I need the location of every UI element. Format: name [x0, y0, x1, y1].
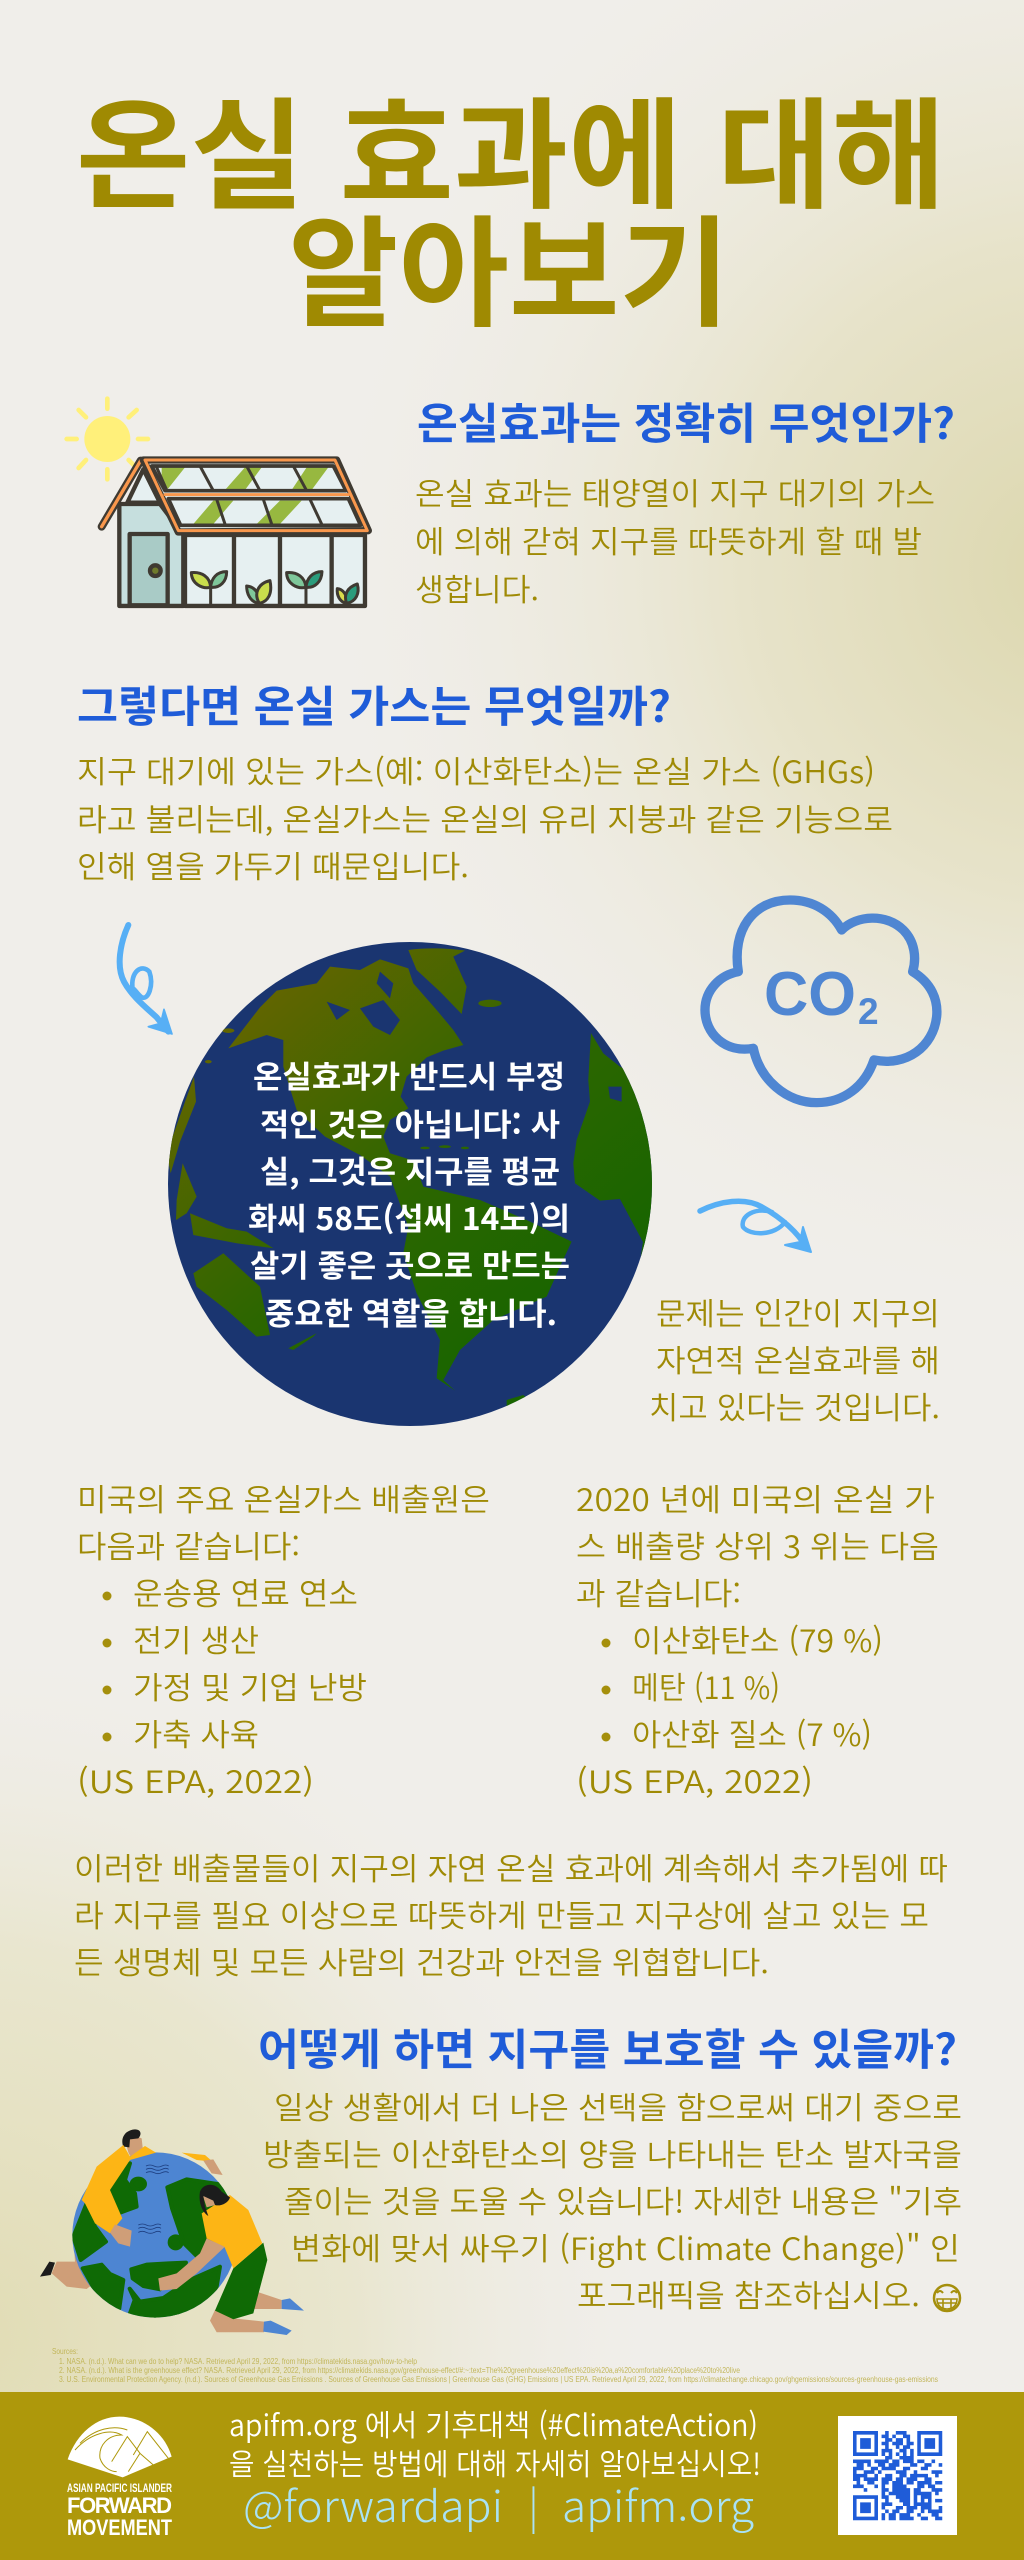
social handles: apifm.org — [562, 2473, 754, 2535]
text block: consequences: 이러한 배출물들이 지구의 자연 온실 효과에 계속해서 추가됨에 따 — [74, 1844, 948, 1889]
logo: MOVEMENT — [67, 2515, 172, 2540]
title: 알아보기 — [288, 177, 730, 351]
callout: text on earth: 적인 것은 아닙니다: 사 — [260, 1100, 560, 1145]
callout: text on earth: 온실효과가 반드시 부정 — [253, 1052, 565, 1097]
text block: top 3 emissions list: (US EPA, 2022) — [576, 1757, 813, 1802]
pacific islands — [190, 1213, 273, 1248]
text block: the problem: 치고 있다는 것입니다. — [649, 1383, 940, 1428]
man back arm — [182, 2153, 213, 2162]
text block: main emission sources list: 가정 및 기업 난방 — [133, 1663, 367, 1708]
caribbean islands — [420, 1147, 430, 1149]
text block: greenhouse effect definition — [415, 469, 935, 610]
social handles: | — [528, 2473, 539, 2535]
social handles: @forwardapi — [243, 2473, 503, 2535]
sources — [52, 2347, 938, 2384]
woman shirt — [202, 2195, 262, 2268]
text block: reduce carbon footprint: 방출되는 이산화탄소의 양을 나타내는 탄소 발자국을 — [263, 2130, 962, 2175]
logo — [67, 2417, 172, 2540]
text block: main emission sources list: 미국의 주요 온실가스 배출원은 — [77, 1475, 490, 1520]
text block: greenhouse gases explanation: 라고 불리는데, 온실가스는 온실의 유리 지붕과 같은 기능으로 — [77, 795, 893, 840]
sources: 2. NASA. (n.d.). What is the greenhouse effect? NASA. Retrieved April 29, 2022, from https://climatekids.nasa.gov/greenhouse-effect/#:~:text=The%20greenhouse%20effect%20is%20a,a%20comfortable%20place%20to%20live — [59, 2366, 740, 2375]
text block: main emission sources list: 가축 사육 — [133, 1710, 259, 1755]
text block: consequences — [74, 1844, 948, 1983]
hudson bay — [327, 972, 622, 1102]
logo: FORWARD — [67, 2493, 172, 2518]
heading: how to protect earth: 어떻게 하면 지구를 보호할 수 있을까? — [258, 2016, 957, 2078]
QR code — [838, 2416, 957, 2535]
text block: the problem: 자연적 온실효과를 해 — [656, 1336, 940, 1381]
callout: text on earth: 실, 그것은 지구를 평균 — [260, 1147, 560, 1192]
text block: greenhouse gases explanation: 인해 열을 가두기 때문입니다. — [77, 842, 469, 887]
text block: reduce carbon footprint: 줄이는 것을 도울 수 있습니다! 자세한 내용은 "기후 — [284, 2177, 962, 2222]
text block: top 3 emissions list: 이산화탄소 (79 %) — [632, 1616, 883, 1661]
man torso — [82, 2145, 156, 2233]
icon: greenhouse with sun — [67, 399, 368, 606]
logo: ASIAN PACIFIC ISLANDER — [67, 2481, 172, 2495]
text block: reduce carbon footprint: 변화에 맞서 싸우기 (Fight Climate Change)" 인 — [291, 2224, 960, 2269]
house walls — [119, 469, 365, 606]
iceland — [478, 1000, 502, 1007]
icon: CO2 cloud: CO — [764, 960, 856, 1029]
icon: grin emoji — [934, 2285, 960, 2311]
man hands — [110, 2224, 132, 2247]
text block: main emission sources list — [77, 1475, 490, 1802]
callout: text on earth: 화씨 58도(섭씨 14도)의 — [248, 1194, 570, 1239]
text block: greenhouse effect definition: 에 의해 갇혀 지구를 따뜻하게 할 때 발 — [415, 517, 922, 562]
illustration: people hugging earth — [40, 2129, 304, 2335]
man head — [124, 2135, 143, 2158]
text block: consequences: 라 지구를 필요 이상으로 따뜻하게 만들고 지구상에 살고 있는 모 — [74, 1891, 929, 1936]
alaska islands — [222, 1028, 234, 1033]
text block: reduce carbon footprint — [263, 2083, 962, 2316]
text block: main emission sources list: 다음과 같습니다: — [77, 1522, 300, 1567]
north and south america — [228, 959, 572, 1391]
text block: main emission sources list: 전기 생산 — [133, 1616, 259, 1661]
text block: the problem — [649, 1289, 940, 1428]
globe land — [73, 2163, 238, 2320]
antarctica — [506, 1395, 526, 1406]
icon: CO2 cloud: 2 — [858, 991, 879, 1032]
icon: CO2 cloud — [705, 900, 937, 1103]
text block: greenhouse gases explanation: 지구 대기에 있는 가스(예: 이산화탄소)는 온실 가스 (GHGs) — [77, 747, 875, 792]
text block: reduce carbon footprint: 일상 생활에서 더 나은 선택을 함으로써 대기 중으로 — [274, 2083, 962, 2128]
southeast asia — [176, 1163, 197, 1220]
title: 온실 효과에 대해 — [76, 59, 946, 233]
roof — [102, 460, 368, 532]
new zealand — [288, 1333, 317, 1350]
asia edge — [167, 1077, 196, 1173]
woman arm — [158, 2238, 225, 2291]
arrow: pointing to earth — [120, 925, 172, 1034]
text block: main emission sources list: 운송용 연료 연소 — [133, 1569, 358, 1614]
text block: consequences: 든 생명체 및 모든 사람의 건강과 안전을 위협합니다. — [74, 1938, 769, 1983]
heading: what are greenhouse gases: 그렇다면 온실 가스는 무엇일까? — [77, 673, 671, 735]
sources: 1. NASA. (n.d.). What can we do to help? NASA. Retrieved April 29, 2022, from https://climatekids.nasa.gov/how-to-help — [59, 2357, 417, 2366]
callout: text on earth — [248, 1052, 570, 1334]
call to action text: 을 실천하는 방법에 대해 자세히 알아보십시오! — [229, 2440, 761, 2484]
australia — [193, 1253, 270, 1337]
heading: what is the greenhouse effect: 온실효과는 정확히 무엇인가? — [417, 390, 955, 452]
plants — [191, 572, 358, 604]
woman head — [203, 2195, 217, 2207]
woman legs — [247, 2292, 282, 2309]
text block: reduce carbon footprint: 포그래픽을 참조하십시오. — [577, 2271, 920, 2316]
woman shoes — [282, 2298, 304, 2311]
africa and europe — [573, 1033, 652, 1258]
text block: the problem: 문제는 인간이 지구의 — [656, 1289, 940, 1334]
text block: top 3 emissions list: 과 같습니다: — [576, 1569, 741, 1614]
globe — [72, 2152, 238, 2318]
greenland — [408, 948, 467, 1014]
call to action text — [229, 2401, 761, 2484]
title — [76, 59, 946, 351]
text block: top 3 emissions list: 2020 년에 미국의 온실 가 — [576, 1475, 935, 1520]
call to action text: apifm.org 에서 기후대책 (#ClimateAction) — [229, 2401, 758, 2445]
sources: Sources: — [52, 2347, 78, 2356]
text block: top 3 emissions list: 아산화 질소 (7 %) — [632, 1710, 872, 1755]
text block: greenhouse gases explanation — [77, 747, 893, 887]
text block: main emission sources list: (US EPA, 2022) — [77, 1757, 314, 1802]
icon: sun — [67, 399, 148, 479]
arrow: pointing to problem text — [700, 1201, 811, 1252]
social handles — [243, 2473, 754, 2535]
shoe — [40, 2262, 55, 2277]
text block: greenhouse effect definition: 생합니다. — [415, 565, 539, 610]
text block: top 3 emissions list — [576, 1475, 939, 1802]
icon: earth globe — [167, 942, 660, 1426]
text block: top 3 emissions list: 스 배출량 상위 3 위는 다음 — [576, 1522, 939, 1567]
callout: text on earth: 중요한 역할을 합니다. — [265, 1289, 557, 1334]
man leg — [52, 2203, 92, 2289]
callout: text on earth: 살기 좋은 곳으로 만드는 — [250, 1241, 570, 1286]
text block: greenhouse effect definition: 온실 효과는 태양열이 지구 대기의 가스 — [415, 469, 935, 514]
footer band — [0, 2392, 1024, 2560]
waves — [138, 2165, 169, 2233]
woman shorts — [215, 2243, 267, 2319]
text block: top 3 emissions list: 메탄 (11 %) — [632, 1663, 780, 1708]
